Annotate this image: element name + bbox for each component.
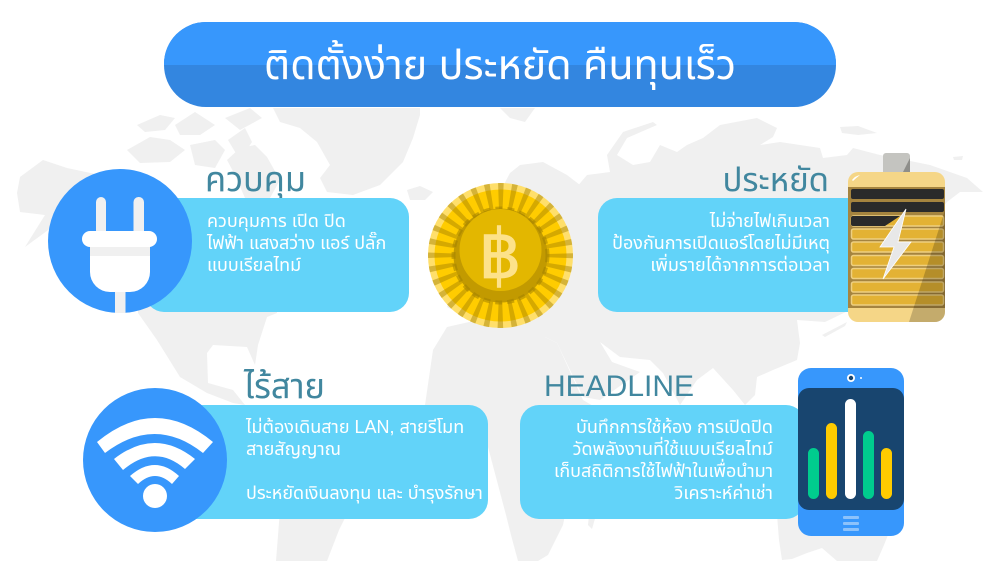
- control text: [206, 211, 386, 275]
- savings heading: ประหยัด: [722, 161, 829, 198]
- headline text card: [520, 405, 805, 519]
- title text: ติดตั้งง่าย ประหยัด คืนทุนเร็ว: [264, 42, 736, 88]
- savings text: [612, 211, 830, 275]
- panel: headline: [520, 368, 904, 536]
- icon: battery: [848, 153, 945, 322]
- headline text: บันทึกการใช้ห้อง การเปิดปิด: [576, 417, 773, 437]
- wireless heading: ไร้สาย: [244, 368, 325, 406]
- title banner: [164, 22, 836, 107]
- savings text: ป้องกันการเปิดแอร์โดยไม่มีเหตุ: [612, 233, 830, 253]
- wireless text card: [173, 405, 488, 519]
- icon: baht coin: [428, 183, 573, 328]
- savings text: ไม่จ่ายไฟเกินเวลา: [710, 211, 830, 231]
- panel: control: [48, 161, 409, 313]
- headline text: [554, 417, 773, 503]
- icon: phone with bars: [798, 368, 904, 536]
- wireless text: ประหยัดเงินลงทุน และ บำรุงรักษา: [246, 483, 483, 503]
- headline text: วัดพลังงานที่ใช้แบบเรียลไทม์: [573, 439, 773, 459]
- icon: plug: [48, 169, 192, 313]
- icon: baht coin: ฿: [478, 217, 522, 293]
- wireless text: ไม่ต้องเดินสาย LAN, สายรีโมท: [246, 417, 464, 437]
- control heading: ควบคุม: [205, 161, 306, 199]
- panel: savings: [598, 153, 945, 322]
- headline text: เก็บสถิติการใช้ไฟฟ้าในเพื่อนำมา: [554, 461, 773, 481]
- icon: wifi: [83, 388, 227, 532]
- savings text: เพิ่มรายได้จากการต่อเวลา: [650, 255, 830, 275]
- control text: ควบคุมการ เปิด ปิด: [207, 211, 346, 231]
- control text card: [145, 198, 409, 312]
- control text: ไฟฟ้า แสงสว่าง แอร์ ปลั๊ก: [207, 233, 386, 253]
- wireless text: [246, 417, 483, 504]
- savings text card: [598, 198, 868, 312]
- wireless text: สายสัญญาณ: [246, 439, 341, 459]
- control text: แบบเรียลไทม์: [207, 255, 301, 275]
- headline text: วิเคราะห์ค่าเช่า: [675, 483, 773, 503]
- panel: wireless: [83, 368, 488, 532]
- headline heading: HEADLINE: [544, 370, 694, 403]
